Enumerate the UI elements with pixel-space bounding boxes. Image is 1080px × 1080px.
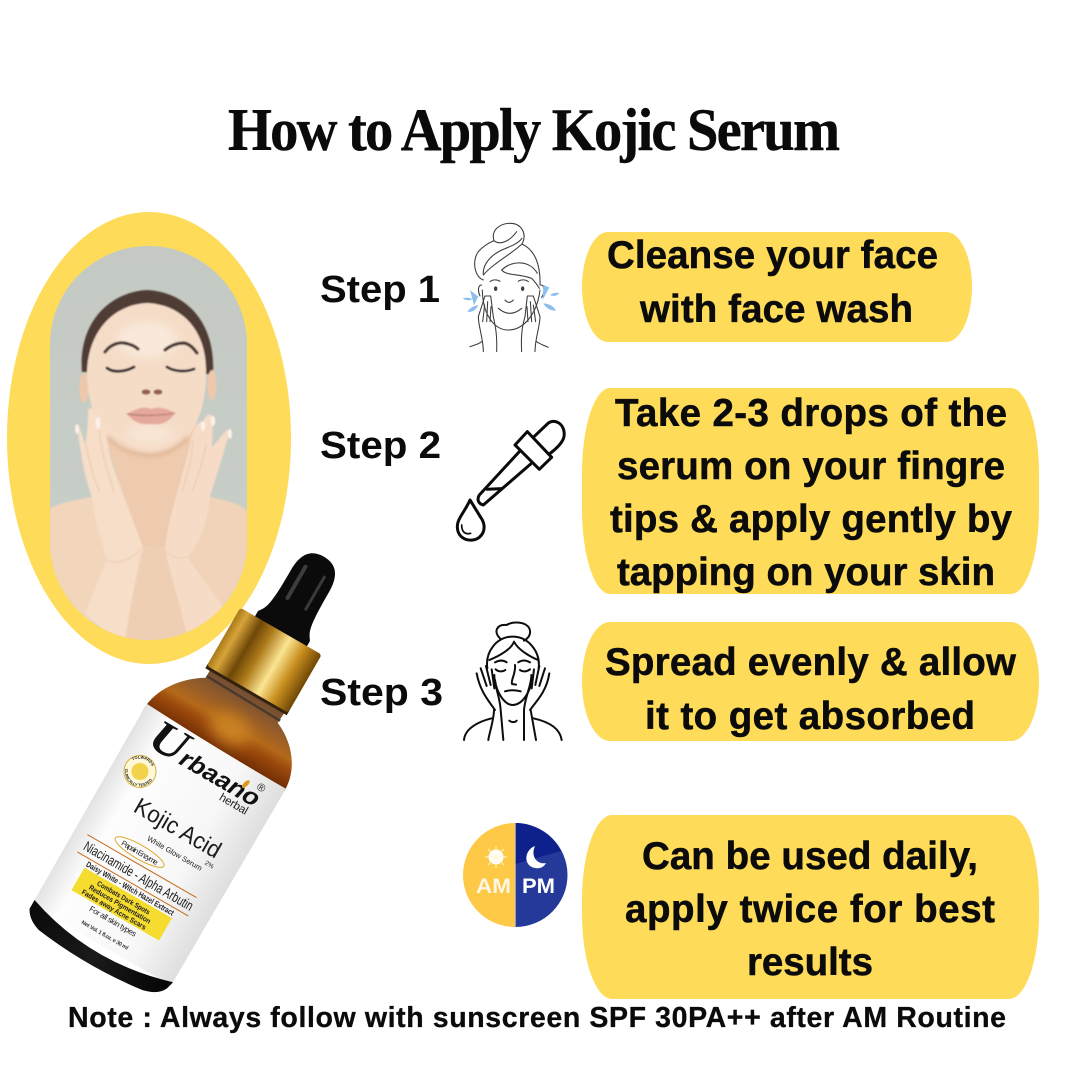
portrait photo illustration: [50, 246, 247, 640]
skin type: For all skin types: [88, 904, 138, 939]
product bottle: [30, 553, 336, 992]
panel: step 2 instruction: [582, 388, 1039, 594]
registered mark: ®: [254, 781, 267, 795]
panel: step 1 instruction: Cleanse your face: [607, 234, 938, 277]
panel: usage frequency: results: [747, 941, 873, 984]
left hand and forearm: [77, 408, 143, 640]
panel: usage frequency: apply twice for best: [625, 888, 995, 931]
enzyme badge: [112, 832, 167, 872]
net volume: Net Vol. 1 fl.oz. e 30 ml: [80, 920, 129, 952]
ingredient lines: Niacinamide - Alpha Arbutin: [81, 838, 196, 914]
panel: step 3 instruction: it to get absorbed: [645, 695, 975, 738]
title: How to Apply Kojic Serum: [228, 96, 840, 163]
panel: step 2 instruction: serum on your fingre: [617, 445, 1005, 488]
icon: cleansing face with towel: [463, 223, 559, 352]
brand name: Urbaano: [141, 709, 275, 816]
step labels: [320, 269, 443, 714]
right hand and forearm: [165, 415, 230, 635]
panel: step 1 instruction: with face wash: [639, 288, 913, 331]
tested seal: [123, 754, 156, 788]
panel: step 3 instruction: Spread evenly & allow: [605, 641, 1017, 684]
product descriptor: White Glow Serum: [146, 834, 204, 873]
gold collar: [207, 608, 322, 713]
panel: step 2 instruction: Take 2-3 drops of the: [615, 392, 1007, 435]
ingredient lines: Daisy White - Witch Hazel Extract: [84, 860, 176, 918]
icon: spreading serum on face: [464, 622, 562, 740]
step 1 label: Step 1: [320, 269, 440, 311]
step 3 label: Step 3: [320, 672, 443, 714]
dropper bulb: [253, 542, 350, 650]
panel: step 3 instruction: [582, 622, 1039, 741]
enzyme badge: Papain Enzyme: [120, 839, 160, 867]
bottle base: [21, 900, 174, 1005]
icon: AM PM day and night badge: AM: [476, 875, 511, 898]
benefits box: Reduces Pigmentation: [87, 883, 152, 926]
panel: step 2 instruction: tips & apply gently by: [610, 498, 1013, 541]
benefits box: [71, 868, 172, 941]
product name: Kojic Acid: [130, 793, 226, 863]
benefits box: Combats Dark Spots: [95, 879, 152, 917]
amber glass shoulder: [143, 647, 321, 791]
tested seal: CLINICALLY TESTED: [124, 768, 152, 786]
yellow oval backdrop: [7, 212, 291, 664]
white label: [31, 704, 288, 986]
step 2 label: Step 2: [320, 425, 441, 467]
product strength: 2%: [203, 860, 215, 871]
tested seal: TOLWARDS: [132, 756, 154, 766]
brand sub-name: herbal: [217, 792, 250, 818]
panel: model portrait in yellow oval: [7, 212, 291, 664]
icon: AM PM day and night badge: PM: [522, 875, 555, 898]
panel: step 1 instruction: [582, 232, 972, 342]
icon: AM PM day and night badge: [463, 823, 568, 927]
panel: usage frequency: [582, 815, 1039, 999]
benefits box: Fades away Acne Scars: [80, 887, 148, 932]
ingredient lines: [72, 835, 198, 925]
icon: serum dropper: [457, 421, 564, 540]
note text: Note : Always follow with sunscreen SPF 30PA++ after AM Routine: [68, 1002, 1006, 1034]
panel: usage frequency: Can be used daily,: [642, 835, 978, 878]
brand flame accent: [241, 779, 251, 789]
panel: step 2 instruction: tapping on your skin: [617, 551, 995, 594]
